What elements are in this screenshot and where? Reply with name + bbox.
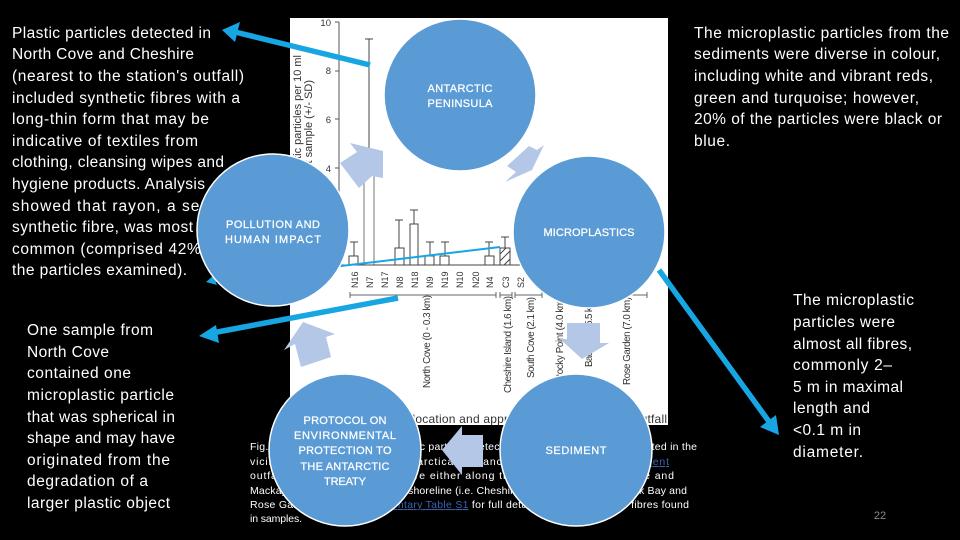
- caption: [250, 441, 697, 525]
- sample labels: N4: [485, 276, 495, 288]
- text: colour of particles: blue.: [694, 133, 730, 150]
- text: spherical particle: originated from the: [27, 452, 170, 469]
- caption: Fig. 3. Mean number of microplastic particles detected per sediment sample collected in the: [250, 441, 697, 453]
- node: microplastics: MICROPLASTICS: [544, 227, 634, 239]
- text: colour of particles: The microplastic particles from the: [694, 25, 949, 42]
- sample labels: [350, 271, 526, 288]
- site labels: Cheshire Island (1.6 km): [503, 296, 514, 393]
- text: colour of particles: including white and vibrant reds,: [694, 68, 933, 85]
- text: rothera outfall findings: the particles examined).: [12, 262, 187, 279]
- node: microplastics: [513, 156, 665, 308]
- node: protocol: ENVIRONMENTAL: [294, 430, 396, 442]
- cycle arrow: protocol to pollution: [284, 322, 335, 367]
- sample labels: N9: [425, 276, 435, 288]
- text: spherical particle: North Cove: [27, 344, 109, 361]
- sample labels: N16: [350, 271, 360, 288]
- node: protocol: PROTOCOL ON: [304, 415, 387, 427]
- text: particle size: almost all fibres,: [793, 336, 912, 353]
- text: rothera outfall findings: included synthetic fibres with a: [12, 90, 240, 107]
- sample labels: N19: [440, 271, 450, 288]
- site labels: North Cove (0 - 0.3 km): [422, 295, 433, 388]
- text: particle size: length and: [793, 400, 870, 417]
- text: spherical particle: [27, 322, 175, 512]
- node: pollution and human impact: POLLUTION AND: [226, 219, 320, 231]
- text: spherical particle: degradation of a: [27, 473, 148, 490]
- caption: vicinity of Rothera Station, Antarctica. Distances from the station's treatment: [250, 456, 669, 468]
- y axis labels: 8: [326, 66, 331, 77]
- sample labels: S2: [516, 277, 526, 288]
- text: colour of particles: [694, 25, 949, 150]
- caption: outfall are shown; distances are either along the shoreline of North Cove and: [250, 470, 674, 482]
- node: protocol: [269, 374, 421, 526]
- text: particle size: diameter.: [793, 444, 863, 461]
- text: spherical particle: shape and may have: [27, 430, 175, 447]
- text: rothera outfall findings: [12, 25, 244, 279]
- cycle arrow: sediment to protocol: [442, 426, 483, 475]
- node: protocol: TREATY: [324, 476, 367, 488]
- node: antarctic peninsula: [384, 19, 536, 171]
- y axis labels: 4: [326, 164, 331, 175]
- sample labels: C3: [501, 276, 511, 288]
- text: colour of particles: sediments were diverse in colour,: [694, 46, 940, 63]
- sample labels: N10: [455, 271, 465, 288]
- sample labels: N8: [395, 276, 405, 288]
- sample labels: N18: [410, 271, 420, 288]
- sample labels: N7: [365, 276, 375, 288]
- node: protocol: PROTECTION TO: [298, 445, 392, 457]
- text: particle size: The microplastic: [793, 292, 914, 309]
- text: rothera outfall findings: Plastic particles detected in: [12, 25, 211, 42]
- caption: Rose Garden). See Supplementary Table S1 for full details of the numbers of fibres found: [250, 499, 689, 511]
- arrow: to spherical text: [199, 298, 398, 343]
- arrow: to particle size text: [659, 270, 779, 435]
- text: rothera outfall findings: showed that rayon, a semi-: [12, 198, 224, 215]
- cycle arrow: microplastics to sediment: [560, 323, 609, 359]
- text: spherical particle: One sample from: [27, 322, 153, 339]
- node: protocol: THE ANTARCTIC: [300, 461, 390, 473]
- y axis: [335, 22, 339, 265]
- text: colour of particles: 20% of the particles were black or: [694, 111, 942, 128]
- text: colour of particles: green and turquoise; however,: [694, 90, 919, 107]
- y axis labels: 10: [320, 18, 331, 29]
- sample labels: N20: [471, 271, 481, 288]
- arrow: to fibres text: [222, 22, 370, 65]
- text: particle size: [793, 292, 914, 461]
- text: spherical particle: microplastic particle: [27, 387, 174, 404]
- caption: in samples.: [250, 513, 302, 525]
- site labels: Sample location and approximate distance from outfall: [367, 412, 667, 426]
- site brackets: [350, 292, 647, 298]
- y axis labels: Microplastic particles per 10 ml: [292, 55, 304, 206]
- site labels: Back Bay (5.5 km): [584, 297, 595, 367]
- text: spherical particle: larger plastic object: [27, 495, 171, 512]
- node: sediment: [500, 374, 652, 526]
- text: spherical particle: contained one: [27, 365, 131, 382]
- arrow: thin line to rayon text: [206, 247, 500, 285]
- y axis labels: [292, 18, 331, 217]
- text: rothera outfall findings: long-thin form that may be: [12, 111, 209, 128]
- site labels: South Cove (2.1 km): [526, 297, 537, 378]
- page number: 22: [874, 510, 886, 522]
- site labels: Rocky Point (4.0 km): [555, 297, 566, 381]
- node: antarctic peninsula: ANTARCTIC: [428, 83, 493, 95]
- text: spherical particle: that was spherical in: [27, 409, 175, 426]
- y axis labels: 6: [326, 115, 331, 126]
- cycle arrow: peninsula to microplastics: [505, 145, 544, 182]
- chart panel: [290, 18, 668, 426]
- caption: Mackay Point or along the direct shoreline (i.e. Cheshire Island, South Cove, Back Bay and: [250, 485, 687, 497]
- text: particle size: <0.1 m in: [793, 422, 861, 439]
- text: rothera outfall findings: clothing, cleansing wipes and: [12, 154, 224, 171]
- text: rothera outfall findings: North Cove and Cheshire: [12, 46, 194, 63]
- node: antarctic peninsula: PENINSULA: [428, 98, 493, 110]
- y axis labels: of sediment sample (+/- SD): [303, 80, 315, 217]
- text: particle size: particles were: [793, 314, 895, 331]
- node: pollution and human impact: HUMAN IMPACT: [225, 234, 321, 246]
- text: rothera outfall findings: synthetic fibre, was most: [12, 219, 194, 236]
- text: particle size: commonly 2–: [793, 357, 892, 374]
- node: sediment: SEDIMENT: [546, 445, 607, 457]
- bars: [339, 39, 520, 265]
- cycle arrow: pollution to peninsula: [340, 143, 383, 188]
- site labels: [367, 295, 667, 426]
- text: rothera outfall findings: common (comprised 42% of: [12, 241, 221, 258]
- node: pollution and human impact: [197, 154, 349, 306]
- site labels: Rose Garden (7.0 km): [622, 297, 633, 385]
- text: rothera outfall findings: indicative of textiles from: [12, 133, 198, 150]
- sample labels: N17: [380, 271, 390, 288]
- text: rothera outfall findings: (nearest to the station's outfall): [12, 68, 244, 85]
- text: particle size: 5 m in maximal: [793, 379, 903, 396]
- text: rothera outfall findings: hygiene products. Analysis: [12, 176, 205, 193]
